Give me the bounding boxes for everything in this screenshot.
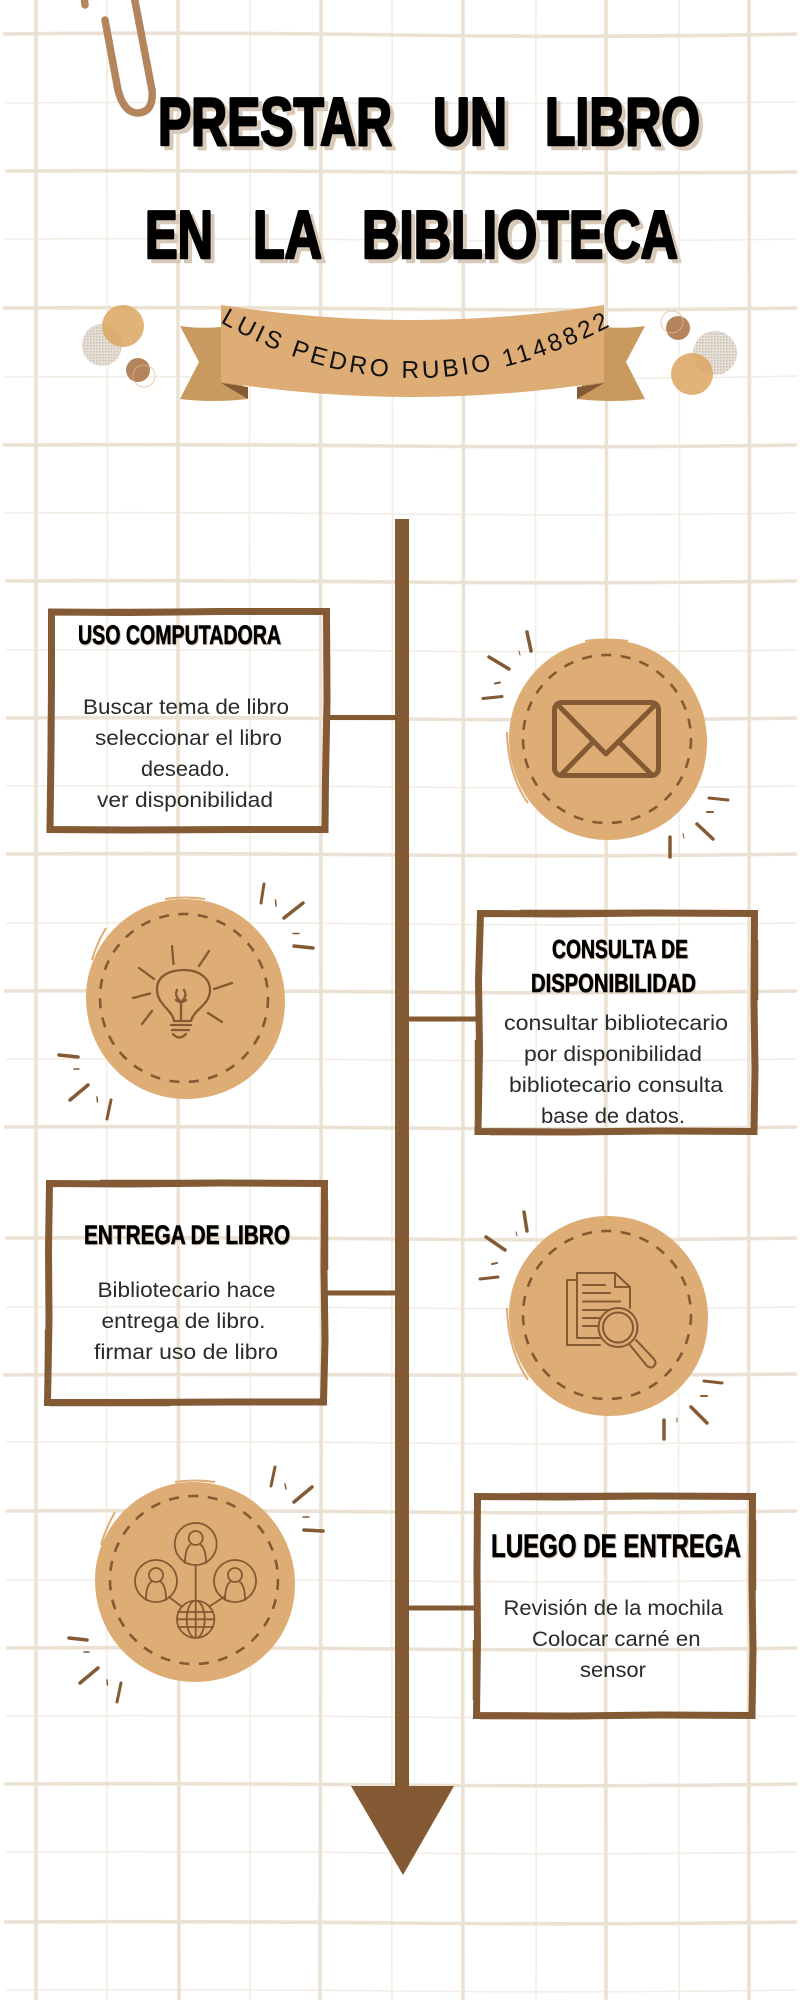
banner ribbon with author name	[180, 305, 645, 401]
body text 2: bibliotecario consulta	[509, 1073, 723, 1097]
title: LA	[253, 197, 322, 273]
body text 3: entrega de libro.	[102, 1309, 266, 1333]
panel: consulta de disponibilidad	[476, 911, 757, 1134]
title: BIBLIOTECA	[362, 197, 678, 273]
title: PRESTAR	[158, 84, 392, 160]
step 2 connector	[408, 1016, 479, 1022]
heading 2	[531, 934, 696, 998]
icon: mail badge	[483, 632, 728, 857]
body text 4: Revisión de la mochila	[504, 1596, 723, 1620]
rays 2	[59, 884, 313, 1119]
body text 2	[504, 1011, 728, 1128]
bulb	[133, 946, 232, 1038]
network of people and globe	[135, 1523, 256, 1638]
envelope	[554, 702, 658, 776]
body text 1: deseado.	[141, 757, 230, 781]
heading 1: USO COMPUTADORA	[78, 620, 281, 650]
title: UN	[433, 84, 507, 160]
body text 4	[504, 1596, 723, 1682]
heading 2: DISPONIBILIDAD	[531, 968, 696, 998]
badge disc 1	[509, 640, 707, 840]
badge disc 3	[509, 1216, 708, 1416]
body text 1: seleccionar el libro	[95, 726, 282, 750]
body text 3: firmar uso de libro	[94, 1340, 278, 1364]
timeline axis with arrow	[351, 519, 454, 1875]
rays 3	[480, 1212, 722, 1439]
title	[145, 84, 700, 273]
box frame 2	[476, 911, 757, 1134]
body text 3: Bibliotecario hace	[98, 1278, 276, 1302]
body text 2: consultar bibliotecario	[504, 1011, 728, 1035]
icon: light bulb badge	[59, 884, 313, 1119]
rays 4	[69, 1467, 323, 1702]
heading 2: CONSULTA DE	[552, 934, 688, 964]
body text 4: Colocar carné en	[532, 1627, 700, 1651]
badge disc 2	[86, 899, 285, 1099]
decorative dots: right cluster	[661, 311, 737, 395]
body text 1	[83, 695, 289, 812]
body text 1: Buscar tema de libro	[83, 695, 289, 719]
box frame 1	[49, 610, 328, 831]
body text 2: base de datos.	[541, 1104, 685, 1128]
badge disc 4	[95, 1482, 295, 1682]
box frame 4	[474, 1494, 755, 1718]
panel: uso computadora	[49, 610, 328, 831]
icon: network badge	[69, 1467, 323, 1702]
body text 2: por disponibilidad	[524, 1042, 702, 1066]
panel: entrega de libro	[46, 1181, 327, 1405]
body text 4: sensor	[580, 1658, 646, 1682]
icon: document search badge	[480, 1212, 722, 1439]
body text 3	[94, 1278, 278, 1364]
rays 1	[483, 632, 728, 857]
step 1 connector	[328, 715, 396, 720]
heading 3: ENTREGA DE LIBRO	[84, 1220, 290, 1250]
step 4 connector	[408, 1606, 475, 1610]
step 3 connector	[326, 1290, 396, 1296]
decorative dots: left cluster	[82, 305, 155, 387]
document and magnifier	[567, 1273, 656, 1368]
body text 1: ver disponibilidad	[97, 788, 273, 812]
title: EN	[145, 197, 213, 273]
title: LIBRO	[545, 84, 700, 160]
panel: luego de entrega	[474, 1494, 755, 1718]
banner ribbon with author name: LUIS PEDRO RUBIO 1148822	[222, 308, 609, 378]
icon: paperclip	[84, 0, 152, 113]
box frame 3	[46, 1181, 327, 1405]
